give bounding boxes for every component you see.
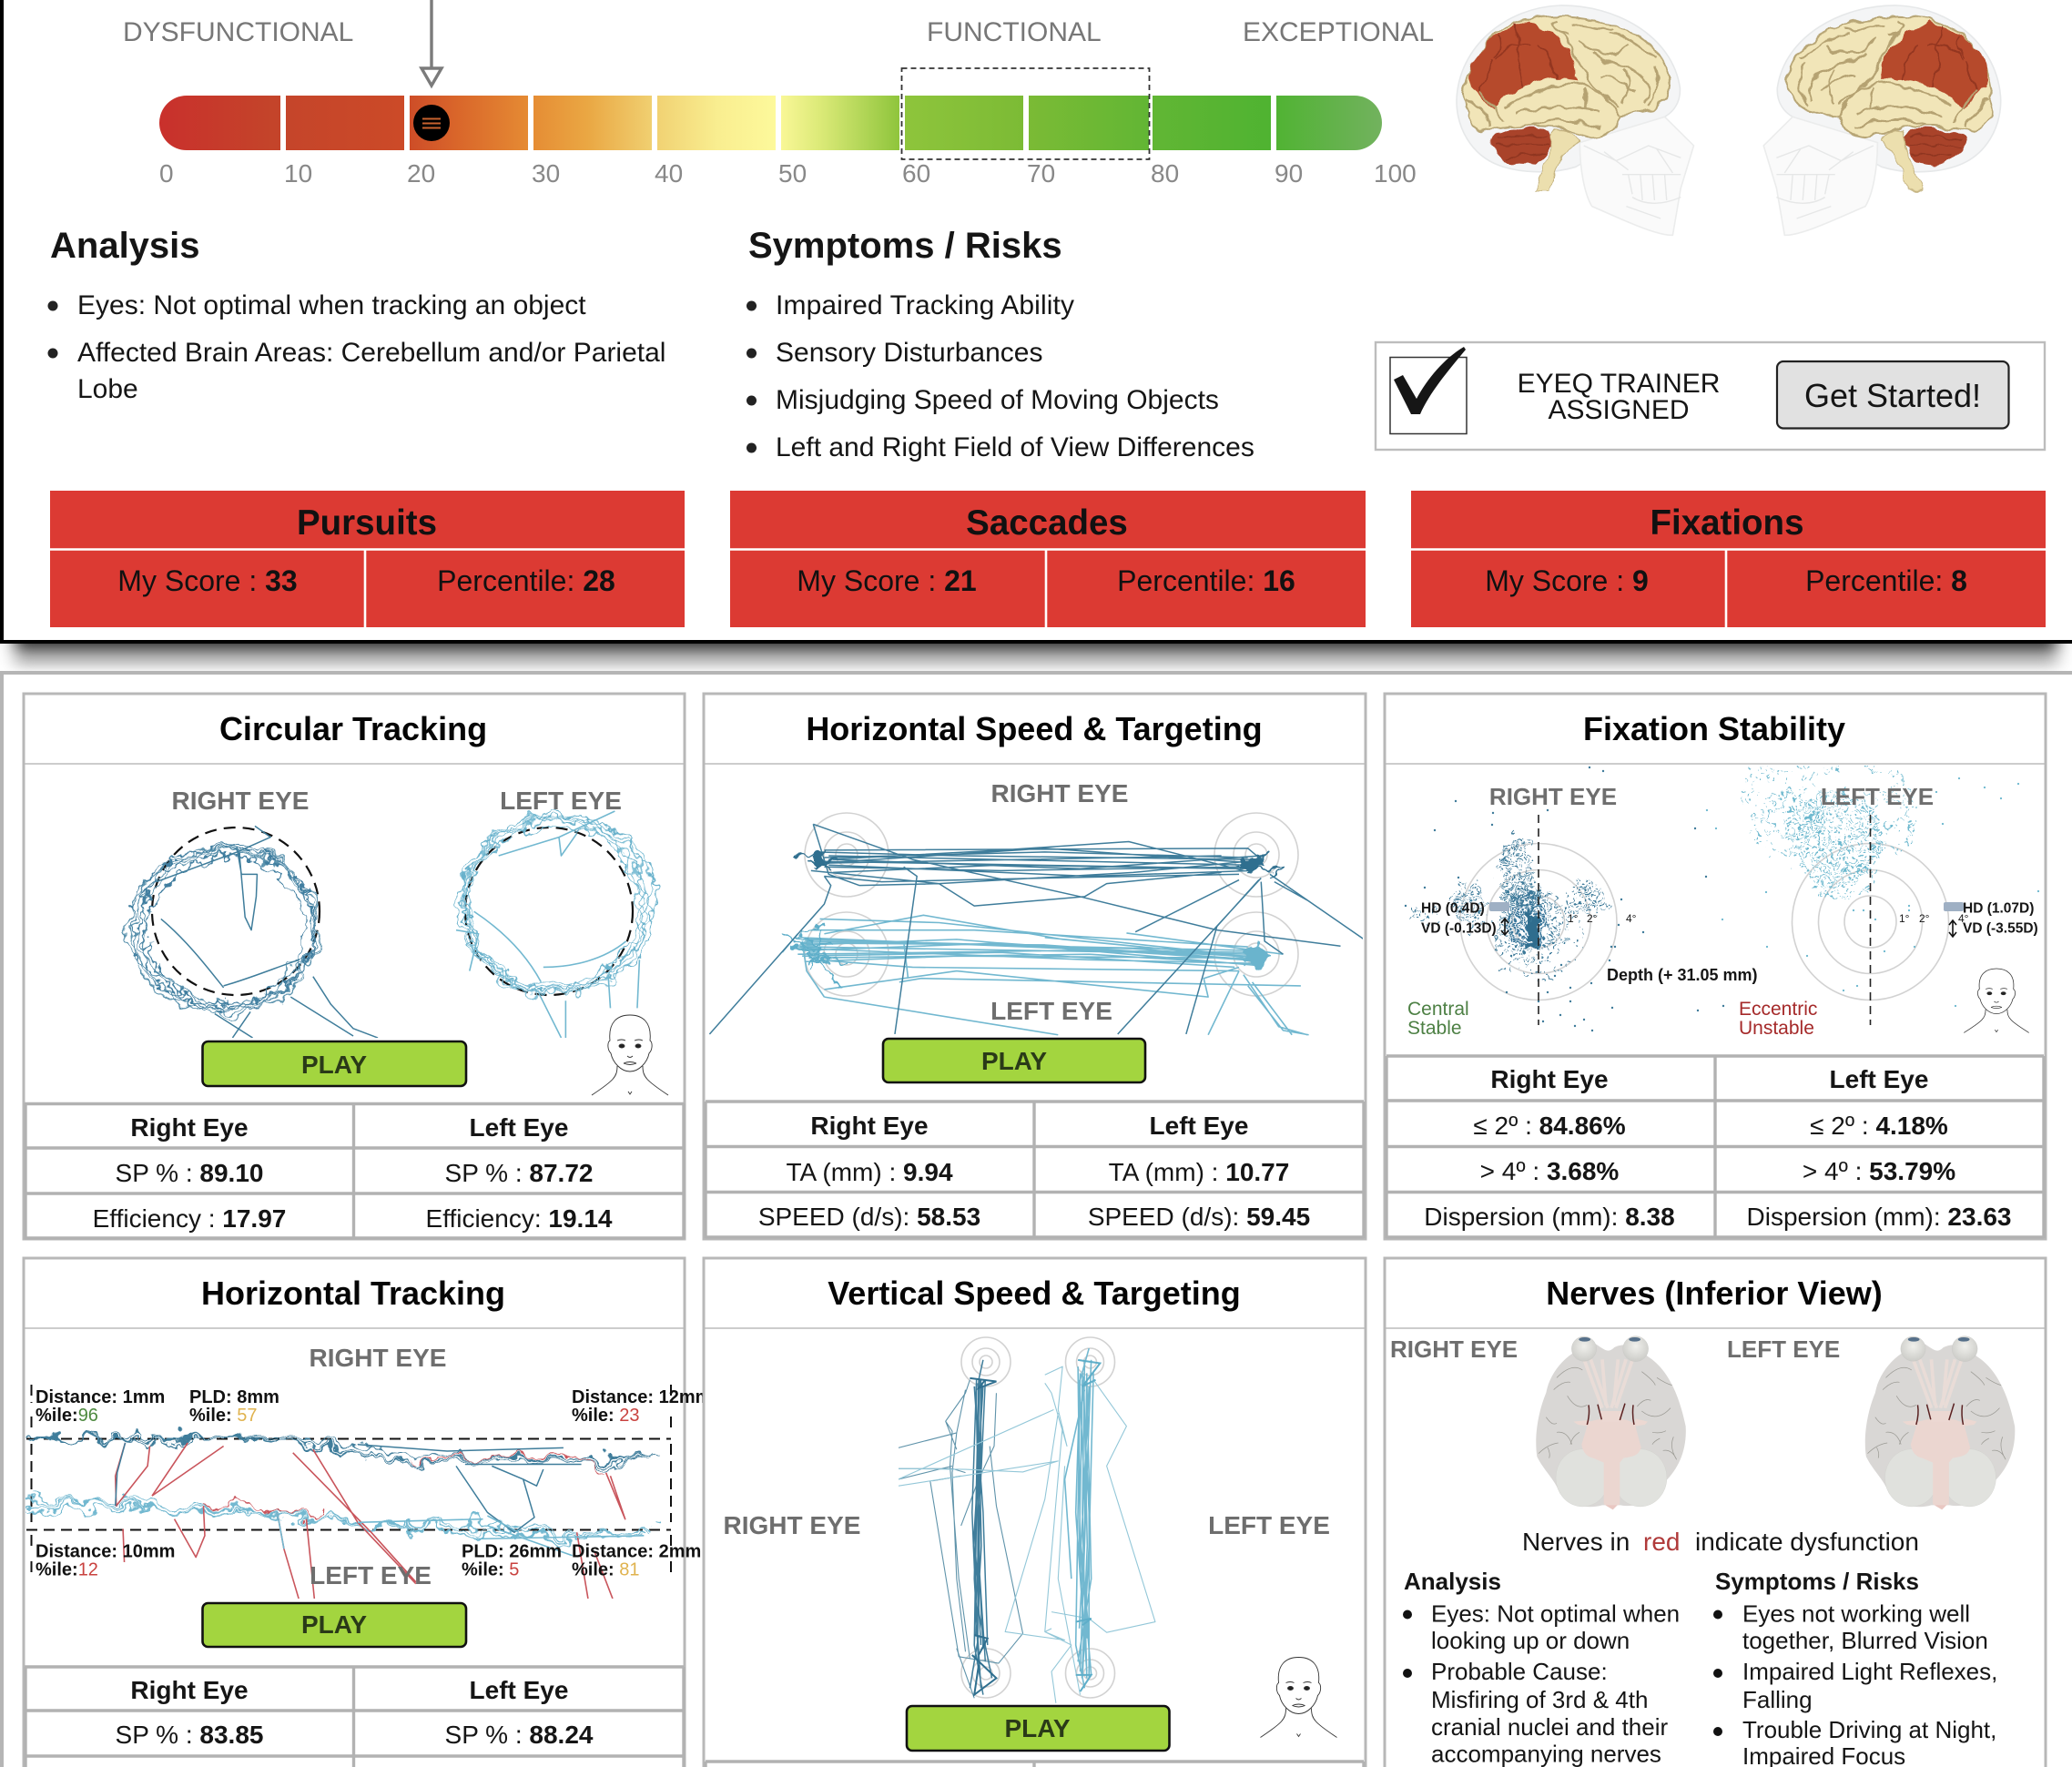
- scale tick labels: 10: [284, 159, 312, 188]
- icon: checkbox: [1390, 347, 1467, 433]
- right eye jagged traces: [129, 847, 319, 1014]
- symptoms list: Trouble Driving at Night,: [1742, 1716, 1996, 1743]
- score card: saccades: [730, 491, 1366, 627]
- stats table: Dispersion (mm): 23.63: [1746, 1203, 2012, 1231]
- heading: Horizontal Speed & Targeting: [806, 710, 1263, 747]
- stats table: Dispersion (mm): 8.38: [1424, 1203, 1675, 1231]
- annotation labels: %ile:12: [36, 1560, 98, 1580]
- stats table: TA (mm) : 10.77: [1109, 1158, 1289, 1186]
- label: dysfunctional: DYSFUNCTIONAL: [123, 17, 353, 47]
- scale tick labels: 20: [407, 159, 435, 188]
- stats table: > 4º : 53.79%: [1803, 1157, 1955, 1185]
- analysis column: [1403, 1568, 1680, 1767]
- right eye label: RIGHT EYE: [724, 1511, 860, 1539]
- chart: circular traces: [129, 811, 655, 1038]
- analysis list: Lobe: [77, 374, 138, 404]
- right eye status: Stable: [1407, 1018, 1462, 1039]
- stats table top: [706, 1762, 1364, 1767]
- icon: head: [1964, 969, 2029, 1032]
- right eye saccade lines: [157, 826, 378, 1038]
- stats table: [25, 1103, 684, 1239]
- play button: PLAY: [301, 1051, 367, 1079]
- right eye label: RIGHT EYE: [1390, 1335, 1518, 1363]
- brain illustration: right side view: [1457, 5, 1693, 235]
- analysis list: [1403, 1600, 1680, 1767]
- right eye target circle: [152, 828, 320, 995]
- stats table: SP % : 88.24: [445, 1721, 594, 1749]
- degree labels: 2°: [1919, 912, 1930, 925]
- symptoms list: [1713, 1600, 1997, 1767]
- right eye label: RIGHT EYE: [310, 1344, 446, 1372]
- depth label: Depth (+ 31.05 mm): [1607, 966, 1758, 984]
- degree labels: 1°: [1568, 912, 1579, 925]
- right eye clusters: [794, 852, 1283, 876]
- left eye label: LEFT EYE: [1727, 1335, 1840, 1363]
- legend sentence: indicate dysfunction: [1695, 1528, 1919, 1556]
- symptoms list: Eyes not working well: [1742, 1600, 1970, 1628]
- left eye scattered dots: [1748, 763, 1913, 898]
- deviation labels: [1421, 901, 2038, 936]
- play button: [883, 1039, 1145, 1082]
- label: exceptional: EXCEPTIONAL: [1243, 17, 1434, 47]
- target rings: [805, 813, 1298, 996]
- stats table: ≤ 2º : 84.86%: [1473, 1112, 1626, 1140]
- stats table: SPEED (d/s): 59.45: [1088, 1203, 1310, 1231]
- right eye label: RIGHT EYE: [1489, 783, 1617, 810]
- right eye dark core: [1508, 895, 1545, 948]
- scale tick labels: 90: [1275, 159, 1303, 188]
- stats table: > 4º : 3.68%: [1480, 1157, 1619, 1185]
- stats table: Left Eye: [470, 1676, 568, 1704]
- annotation labels: Distance: 1mm: [36, 1387, 165, 1407]
- stats table: [1386, 1056, 2044, 1238]
- degree labels: 4°: [1958, 912, 1969, 925]
- left eye status: Unstable: [1739, 1018, 1814, 1039]
- left eye jagged traces: [460, 815, 653, 997]
- symptoms list: together, Blurred Vision: [1742, 1627, 1988, 1654]
- right eye status: Central: [1407, 999, 1469, 1020]
- icon: head: [1260, 1657, 1336, 1737]
- right eye outlier dots: [1406, 767, 1723, 1031]
- left eye second traces: [459, 814, 655, 992]
- left eye status: [1739, 999, 1817, 1039]
- scale tick labels: 30: [532, 159, 560, 188]
- analysis list: looking up or down: [1431, 1627, 1630, 1654]
- left eye outlier dots: [1707, 778, 2038, 1006]
- scale tick labels: 80: [1151, 159, 1179, 188]
- symptoms list: [747, 290, 1254, 462]
- icon: head: [592, 1015, 668, 1095]
- score card: fixations: Percentile: 8: [1805, 564, 1967, 597]
- annotation labels: %ile: 81: [572, 1560, 639, 1580]
- symptoms list: Sensory Disturbances: [776, 338, 1042, 368]
- score card: pursuits: Percentile: 28: [437, 564, 615, 597]
- stats table: Right Eye: [1490, 1065, 1609, 1093]
- target dashed frame: [26, 1385, 671, 1575]
- stats table: Efficiency: 19.14: [426, 1204, 613, 1233]
- panel: circular tracking: [24, 694, 685, 1239]
- heading: Vertical Speed & Targeting: [828, 1274, 1241, 1312]
- left eye label: LEFT EYE: [1208, 1511, 1330, 1539]
- get started button: Get Started!: [1804, 377, 1981, 414]
- scale tick labels: 100: [1374, 159, 1417, 188]
- left eye label: LEFT EYE: [1821, 783, 1934, 810]
- annotation labels: %ile: 5: [462, 1560, 519, 1580]
- right eye jagged traces: [26, 1437, 662, 1466]
- right eye scattered dots: [1410, 841, 1606, 976]
- panel background and borders: [0, 0, 2072, 675]
- symptoms list: Left and Right Field of View Differences: [776, 432, 1254, 462]
- detail section left rule: [0, 675, 4, 1767]
- play button: [202, 1603, 466, 1647]
- functional range dashed box: [901, 68, 1149, 159]
- analysis block: [47, 226, 665, 404]
- stats table: SPEED (d/s): 58.53: [758, 1203, 980, 1231]
- score card: saccades: Percentile: 16: [1117, 564, 1295, 597]
- left eye clusters: [787, 927, 1267, 990]
- deviation labels: VD (-0.13D): [1421, 921, 1497, 936]
- panel: horizontal speed and targeting: [704, 694, 1366, 1239]
- annotation labels: PLD: 26mm: [462, 1542, 562, 1562]
- score card: fixations: [1411, 491, 2046, 627]
- symptoms block: [747, 226, 1254, 462]
- symptoms heading: Symptoms / Risks: [748, 226, 1062, 266]
- heading: Fixation Stability: [1583, 710, 1845, 747]
- deviation indicators: [1489, 902, 1964, 937]
- connecting saccades: [116, 1443, 644, 1599]
- stats table: SP % : 89.10: [116, 1159, 263, 1187]
- degree labels: [1568, 912, 1969, 925]
- get started button: [1777, 361, 2008, 428]
- panel: fixation stability: [1385, 694, 2046, 1239]
- stats table: Right Eye: [130, 1676, 249, 1704]
- score card: fixations: My Score : 9: [1485, 564, 1649, 597]
- trainer text: [1518, 369, 1720, 425]
- left eye label: LEFT EYE: [310, 1561, 432, 1589]
- degree labels: 2°: [1587, 912, 1598, 925]
- score card: saccades: My Score : 21: [797, 564, 977, 597]
- analysis heading: Analysis: [50, 226, 200, 266]
- symptoms column: [1713, 1568, 1997, 1767]
- left eye label: LEFT EYE: [990, 997, 1112, 1025]
- deviation labels: VD (-3.55D): [1963, 921, 2038, 936]
- play button: [907, 1706, 1169, 1751]
- panel: horizontal tracking: [24, 1258, 711, 1767]
- annotation labels: Distance: 2mm: [572, 1542, 701, 1562]
- right eye label: RIGHT EYE: [172, 787, 309, 815]
- stats table: SP % : 83.85: [116, 1721, 263, 1749]
- chart: tracking traces: [26, 1437, 662, 1599]
- score gradient bar: [159, 96, 1382, 150]
- score card: pursuits: Pursuits: [297, 503, 437, 543]
- legend sentence: red: [1643, 1528, 1680, 1556]
- brain illustration: left side view: [1763, 5, 2001, 235]
- panel: nerves inferior view: [1385, 1258, 2046, 1767]
- label: functional: FUNCTIONAL: [927, 17, 1102, 47]
- stats table: SP % : 87.72: [445, 1159, 593, 1187]
- right eye status: [1407, 999, 1469, 1039]
- annotation labels: %ile: 23: [572, 1406, 639, 1426]
- left eye jagged traces: [26, 1496, 657, 1539]
- left eye saccade lines: [456, 811, 639, 1038]
- stats table: Left Eye: [470, 1113, 568, 1142]
- left eye traces: [782, 915, 1309, 1035]
- annotation labels: [36, 1387, 711, 1580]
- nerve brain: right eye: [1536, 1336, 1686, 1509]
- analysis list: Eyes: Not optimal when tracking an object: [77, 290, 586, 320]
- score arrow: [422, 0, 442, 86]
- degree labels: 1°: [1899, 912, 1910, 925]
- score card: pursuits: My Score : 33: [117, 564, 298, 597]
- symptoms list: Impaired Light Reflexes,: [1742, 1658, 1997, 1685]
- play button: PLAY: [981, 1047, 1047, 1075]
- analysis list: accompanying nerves: [1431, 1741, 1661, 1767]
- symptoms list: Impaired Tracking Ability: [776, 290, 1074, 320]
- symptoms heading: Symptoms / Risks: [1715, 1568, 1919, 1595]
- play button: [202, 1041, 466, 1086]
- annotation labels: %ile: 57: [189, 1406, 257, 1426]
- score card: fixations: Fixations: [1650, 503, 1804, 543]
- panel: vertical speed and targeting: [704, 1258, 1366, 1767]
- trainer assigned box: [1376, 342, 2045, 450]
- chart: saccade traces: [899, 1348, 1155, 1703]
- analysis list: cranial nuclei and their: [1431, 1713, 1668, 1741]
- target rings: [961, 1337, 1114, 1698]
- stats table: [706, 1102, 1364, 1238]
- annotation labels: Distance: 10mm: [36, 1542, 175, 1562]
- centre dashed lines: [1539, 815, 1870, 1025]
- trainer text: EYEQ TRAINER: [1518, 369, 1720, 399]
- degree labels: 4°: [1626, 912, 1637, 925]
- stats table: ≤ 2º : 4.18%: [1810, 1112, 1948, 1140]
- analysis heading: Analysis: [1404, 1568, 1501, 1595]
- symptoms list: Falling: [1742, 1686, 1813, 1713]
- right eye traces: [709, 824, 1366, 1034]
- analysis list: Affected Brain Areas: Cerebellum and/or Parietal: [77, 338, 665, 368]
- nerve brain: left eye: [1865, 1336, 2015, 1509]
- heading: Horizontal Tracking: [201, 1274, 505, 1312]
- stats table: Left Eye: [1150, 1112, 1248, 1140]
- heading: Nerves (Inferior View): [1546, 1274, 1883, 1312]
- stats table: Right Eye: [130, 1113, 249, 1142]
- play button: PLAY: [301, 1610, 367, 1639]
- scale tick labels: 40: [655, 159, 683, 188]
- symptoms list: Misjudging Speed of Moving Objects: [776, 385, 1219, 415]
- deviation labels: HD (0.4D): [1421, 901, 1485, 916]
- left eye target circle: [465, 828, 633, 995]
- right eye label: RIGHT EYE: [991, 779, 1128, 807]
- chart: fixation scatter: [1406, 763, 2038, 1031]
- stats table: [25, 1667, 684, 1767]
- trainer text: ASSIGNED: [1548, 395, 1690, 425]
- report summary panel: [0, 0, 2072, 675]
- analysis list: Probable Cause:: [1431, 1658, 1608, 1685]
- right eye traces: [899, 1360, 1023, 1698]
- deviation labels: HD (1.07D): [1963, 901, 2034, 916]
- scale tick labels: 0: [159, 159, 174, 188]
- analysis list: Misfiring of 3rd & 4th: [1431, 1686, 1648, 1713]
- scale tick labels: [159, 159, 1417, 188]
- red segment traces: [203, 1456, 602, 1512]
- chart: saccade traces: [709, 824, 1366, 1035]
- score card: pursuits: [50, 491, 685, 627]
- left eye label: LEFT EYE: [500, 787, 622, 815]
- left eye status: Eccentric: [1739, 999, 1817, 1020]
- analysis list: [47, 290, 665, 404]
- left eye traces: [899, 1348, 1155, 1703]
- score marker: [413, 105, 450, 141]
- stats table: Left Eye: [1830, 1065, 1928, 1093]
- stats table: TA (mm) : 9.94: [786, 1158, 953, 1186]
- annotation labels: Distance: 12mm: [572, 1387, 711, 1407]
- scale tick labels: 70: [1027, 159, 1055, 188]
- scale tick labels: 60: [902, 159, 930, 188]
- score card: saccades: Saccades: [966, 503, 1128, 543]
- heading: Circular Tracking: [219, 710, 487, 747]
- stats table: Efficiency : 17.97: [93, 1204, 286, 1233]
- legend sentence: [1522, 1528, 1919, 1556]
- stats table: Right Eye: [810, 1112, 929, 1140]
- degree rings: [1460, 843, 1948, 1000]
- play button: PLAY: [1004, 1714, 1071, 1742]
- scale tick labels: 50: [778, 159, 807, 188]
- annotation labels: %ile:96: [36, 1406, 98, 1426]
- annotation labels: PLD: 8mm: [189, 1387, 279, 1407]
- right eye second traces: [132, 846, 316, 1010]
- legend sentence: Nerves in: [1522, 1528, 1630, 1556]
- analysis list: Eyes: Not optimal when: [1431, 1600, 1680, 1628]
